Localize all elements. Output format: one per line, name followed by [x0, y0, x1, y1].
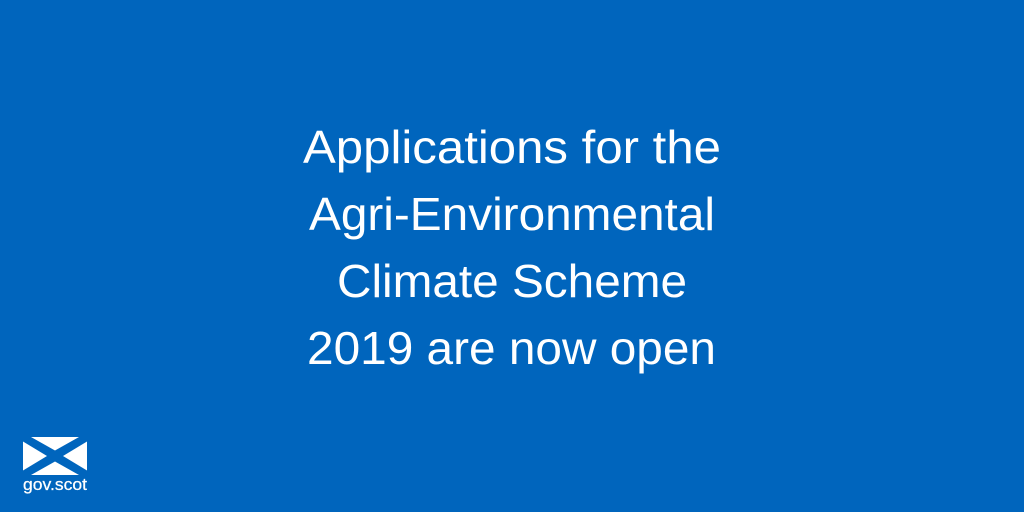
- icon: saltire flag: [23, 437, 87, 475]
- logo: gov.scot: [23, 437, 87, 494]
- logo wordmark: gov.scot: [23, 475, 87, 494]
- title: Agri-Environmental: [309, 188, 715, 240]
- title: Climate Scheme: [337, 255, 687, 307]
- title: [303, 121, 721, 374]
- title: 2019 are now open: [307, 322, 716, 374]
- title: Applications for the: [303, 121, 721, 173]
